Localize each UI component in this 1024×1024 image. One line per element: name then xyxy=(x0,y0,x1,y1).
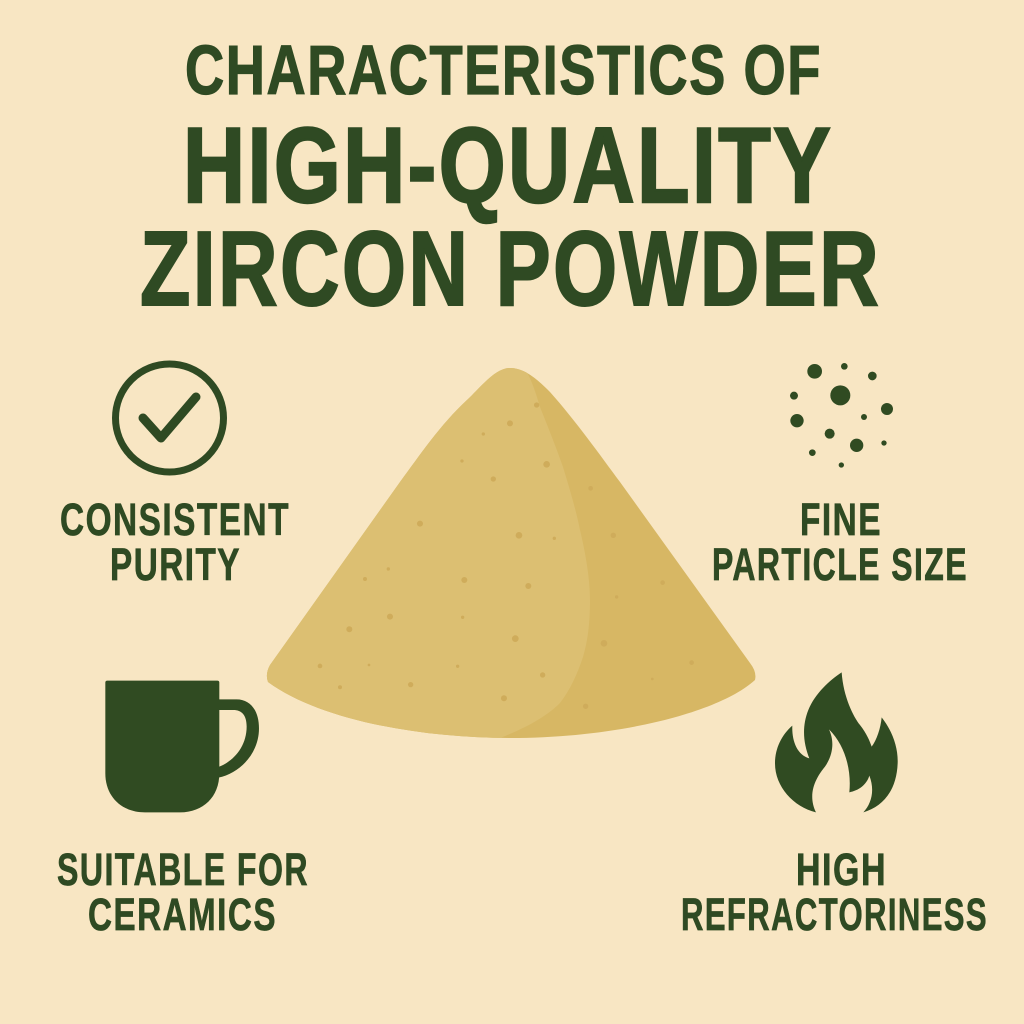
pile speckles xyxy=(318,402,694,709)
pile shaded base xyxy=(267,368,755,738)
label: fine particle size xyxy=(712,494,968,590)
title xyxy=(140,31,881,328)
icon: fine particles xyxy=(790,363,893,468)
label: consistent purity xyxy=(60,494,290,590)
label: high refractoriness: HIGH xyxy=(796,844,887,895)
title: HIGH-QUALITY xyxy=(183,105,833,225)
label: fine particle size: FINE xyxy=(800,494,882,545)
title: CHARACTERISTICS OF xyxy=(185,31,822,109)
label: consistent purity: CONSISTENT xyxy=(60,494,290,545)
icon: ceramic mug xyxy=(105,681,259,812)
label: suitable for ceramics xyxy=(57,844,309,940)
pile lit face xyxy=(266,368,590,738)
label: consistent purity: PURITY xyxy=(110,539,241,590)
powder pile xyxy=(266,368,756,738)
icon: check mark in circle xyxy=(116,364,224,472)
label: high refractoriness xyxy=(681,844,988,940)
label: suitable for ceramics: CERAMICS xyxy=(88,889,277,940)
label: suitable for ceramics: SUITABLE FOR xyxy=(57,844,309,895)
icon: flame xyxy=(775,672,898,812)
